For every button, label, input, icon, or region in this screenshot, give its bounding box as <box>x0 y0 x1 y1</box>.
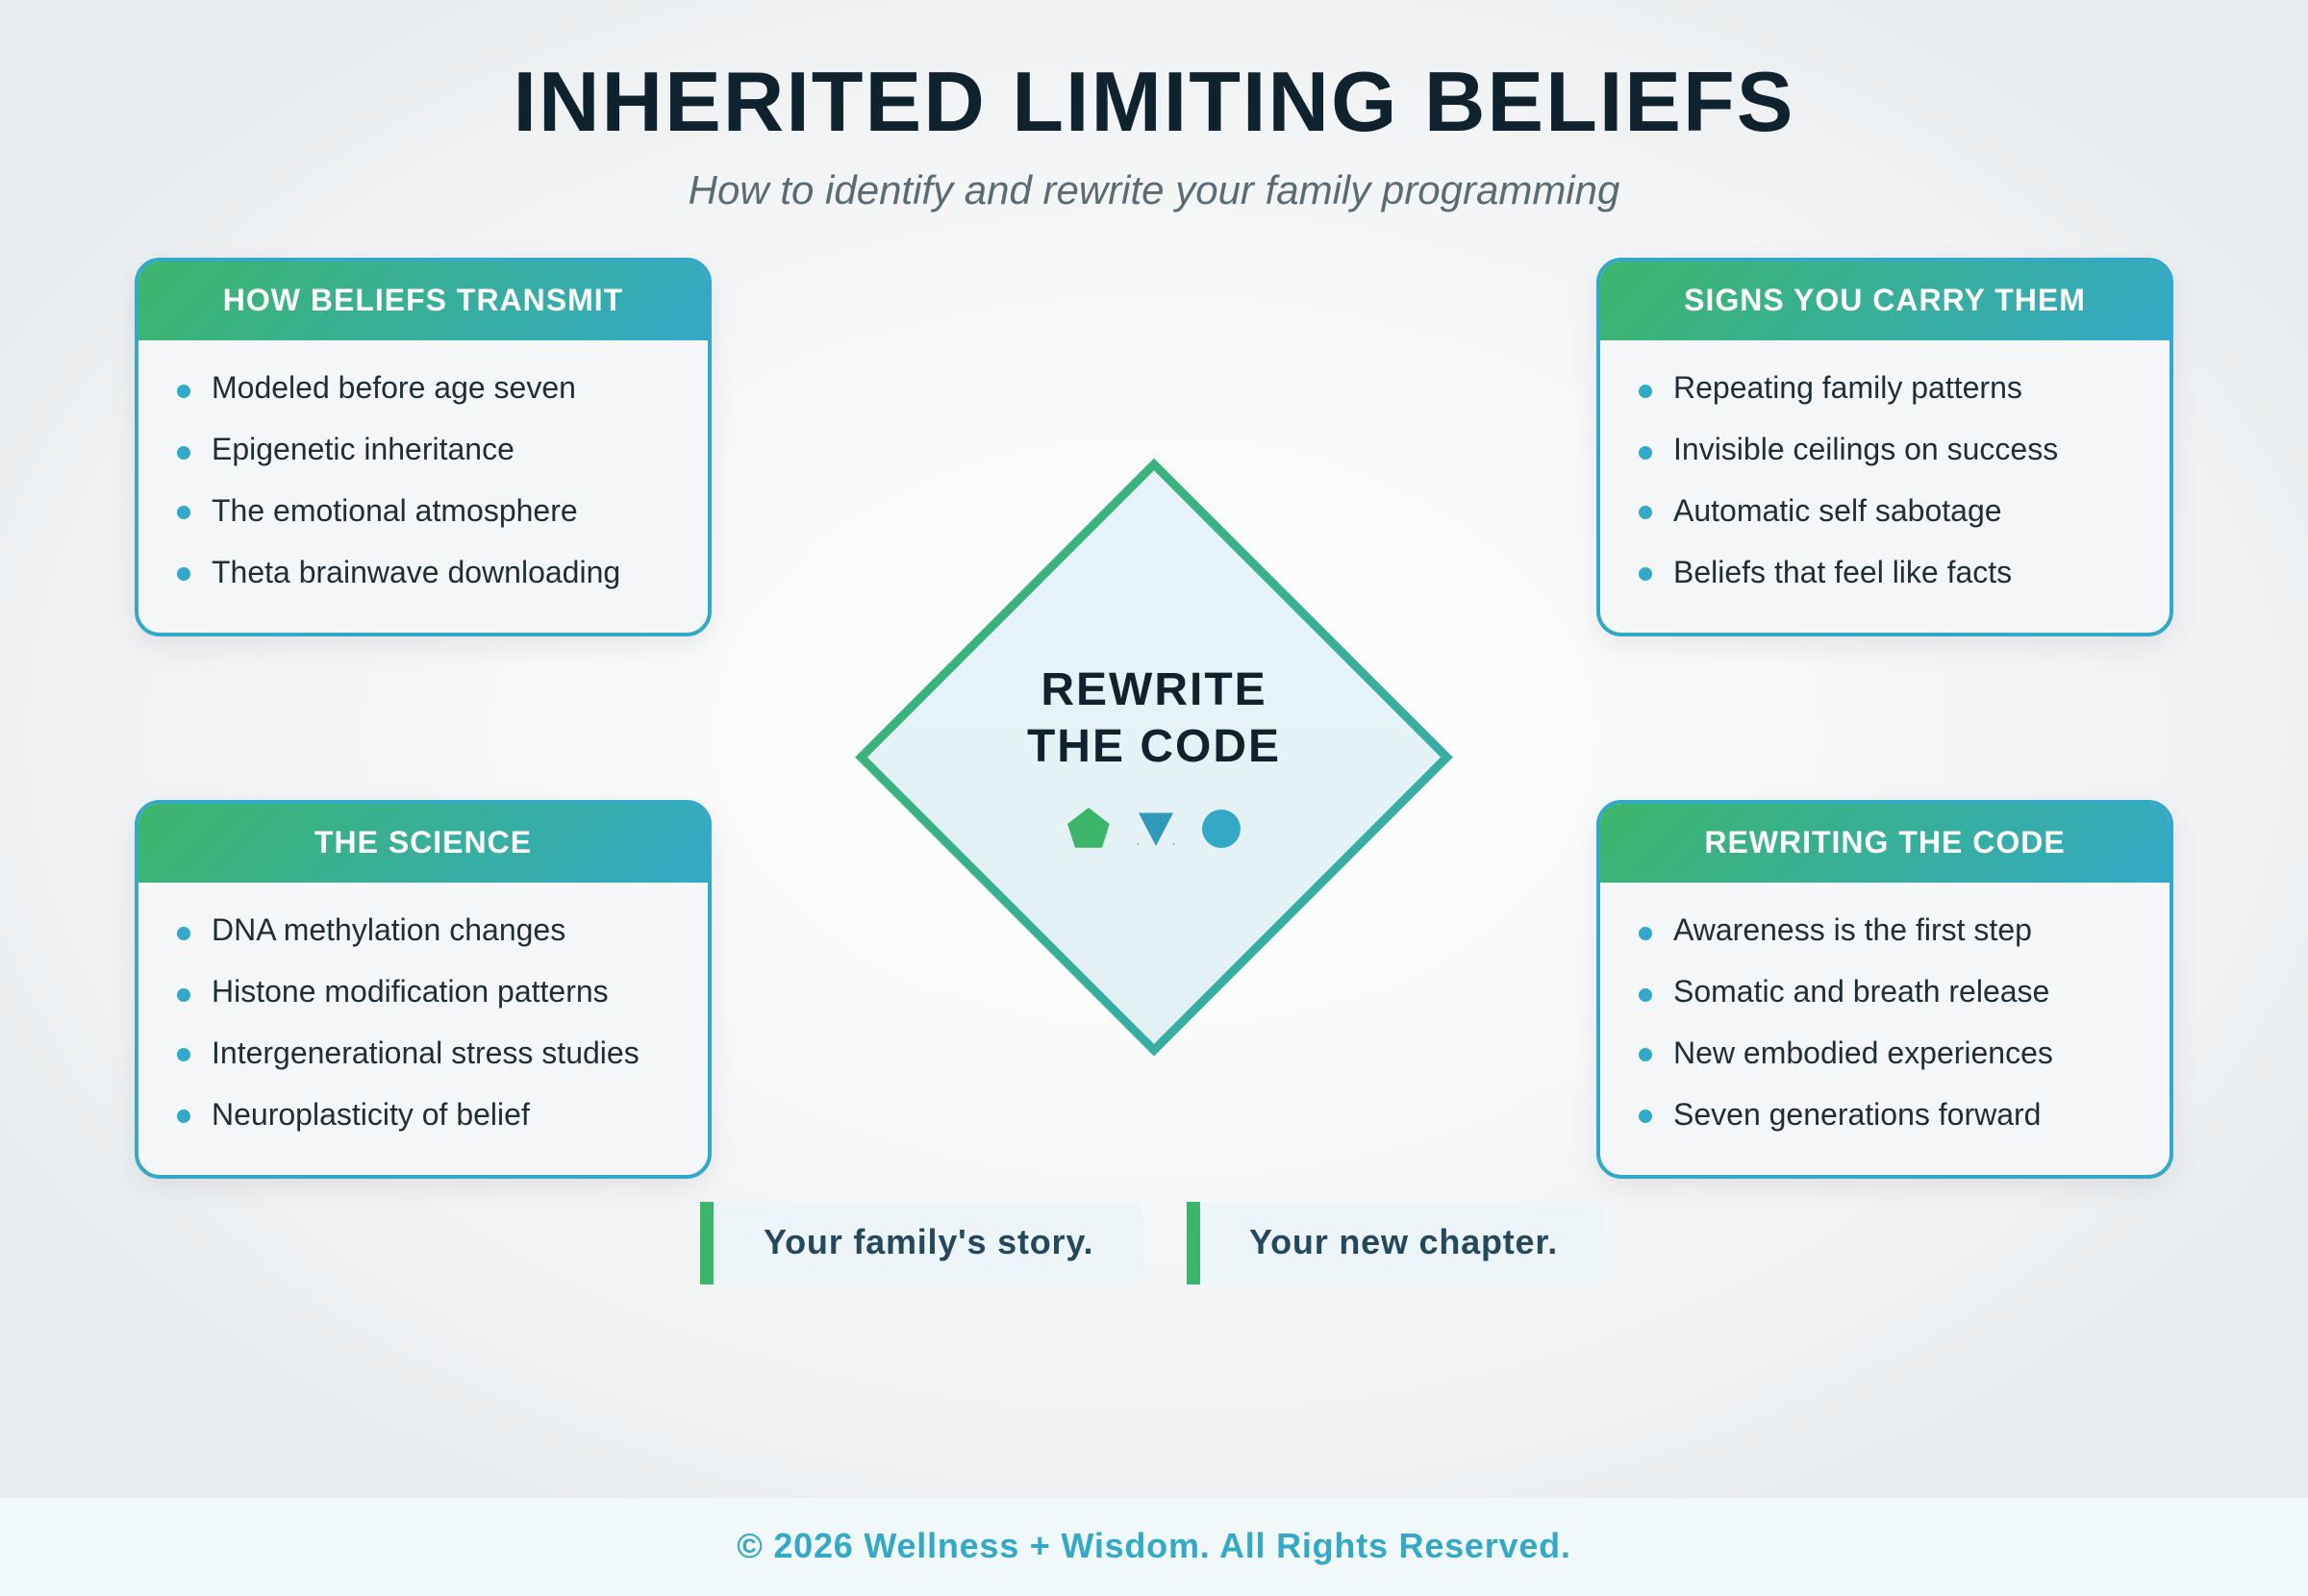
panel: rewriting the code: Seven generations forward <box>1673 1097 2041 1132</box>
panel heading: THE SCIENCE <box>314 825 532 860</box>
panel: rewriting the code: New embodied experiences <box>1673 1035 2053 1070</box>
panel: the science <box>135 800 712 1179</box>
callout: your family's story: Your family's story. <box>764 1222 1093 1261</box>
panel heading: SIGNS YOU CARRY THEM <box>1684 283 2086 317</box>
panel: how beliefs transmit <box>135 258 712 636</box>
panel: rewriting the code <box>1596 800 2173 1179</box>
icon: circle <box>1202 810 1241 848</box>
panel: how beliefs transmit: Modeled before age seven <box>212 370 576 405</box>
panel: signs you carry them: Repeating family patterns <box>1673 370 2022 405</box>
panel: how beliefs transmit: The emotional atmosphere <box>212 493 578 528</box>
title: INHERITED LIMITING BELIEFS <box>514 54 1794 149</box>
icon: triangle <box>1138 813 1174 846</box>
diamond label: REWRITE <box>1041 664 1267 715</box>
panel: the science: DNA methylation changes <box>212 912 565 947</box>
footer: © 2026 Wellness + Wisdom. All Rights Reserved. <box>737 1526 1571 1565</box>
bullet list <box>1639 912 2053 1132</box>
panel heading <box>1600 262 2170 340</box>
callout: your new chapter <box>1187 1202 1607 1284</box>
diamond label second line: THE CODE <box>1027 721 1281 772</box>
callout: your new chapter: Your new chapter. <box>1249 1222 1558 1261</box>
panel: how beliefs transmit: Epigenetic inheritance <box>212 432 514 466</box>
panel heading <box>138 262 708 340</box>
panel heading: HOW BELIEFS TRANSMIT <box>223 283 623 317</box>
panel: the science: Neuroplasticity of belief <box>212 1097 530 1132</box>
panel: signs you carry them: Automatic self sabotage <box>1673 493 2002 528</box>
panel: rewriting the code: Somatic and breath release <box>1673 974 2049 1009</box>
panel: the science: Intergenerational stress studies <box>212 1035 640 1070</box>
footer <box>0 1498 2308 1596</box>
bullet list <box>1639 370 2058 589</box>
panel heading: REWRITING THE CODE <box>1704 825 2066 860</box>
panel heading <box>138 804 708 883</box>
diamond <box>862 464 1446 1050</box>
icon: pentagon <box>1067 808 1110 848</box>
panel: rewriting the code: Awareness is the first step <box>1673 912 2032 947</box>
panel: how beliefs transmit: Theta brainwave downloading <box>212 555 620 589</box>
panel: signs you carry them: Beliefs that feel like facts <box>1673 555 2012 589</box>
bullet list <box>177 912 640 1132</box>
central diamond graphic <box>855 458 1453 1056</box>
panel heading <box>1600 804 2170 883</box>
panel: signs you carry them: Invisible ceilings on success <box>1673 432 2058 466</box>
subtitle: How to identify and rewrite your family programming <box>689 167 1619 212</box>
callout: your family's story <box>700 1202 1143 1284</box>
panel: signs you carry them <box>1596 258 2173 636</box>
panel: the science: Histone modification patterns <box>212 974 609 1009</box>
bullet list <box>177 370 620 589</box>
